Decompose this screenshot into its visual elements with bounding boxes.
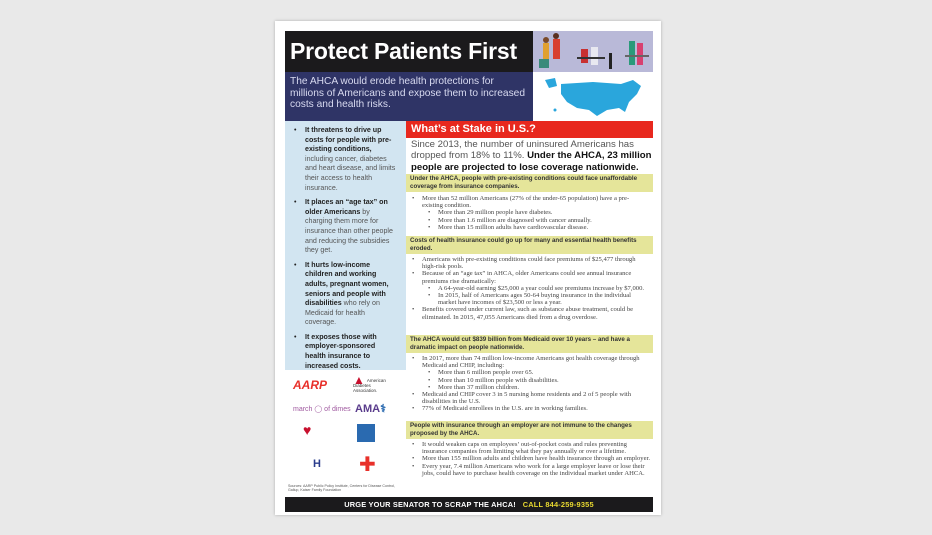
section 2 list: Because of an “age tax” in AHCA, older Americans could see annual insurance premiums rise dramatically: <box>422 270 631 285</box>
section 1 list <box>412 195 629 231</box>
logo: AHA: H <box>313 458 321 470</box>
subtitle band: millions of Americans and expose them to increased <box>290 88 525 98</box>
footer call to action: URGE YOUR SENATOR TO SCRAP THE AHCA! CALL 844-259-9355 <box>344 500 594 509</box>
section 2 list <box>412 256 644 321</box>
subtitle band: costs and health risks. <box>290 99 391 110</box>
section 1 list: More than 52 million Americans (27% of the under-65 population) have a pre-existing condition. <box>422 195 629 209</box>
logo: hospital building <box>357 424 375 442</box>
section 4 list: It would weaken caps on employees’ out-of-pocket costs and rules preventing insurance companies from limiting what they pay annually or over a lifetime. <box>422 441 627 455</box>
section 1 list: More than 15 million adults have cardiovascular disease. <box>438 224 588 231</box>
logo: ADA: American <box>367 378 386 383</box>
left column: key points: It exposes those with employer-sponsored health insurance to increased costs. <box>305 333 377 370</box>
section 2 list: Benefits covered under current law, such as substance abuse treatment, could be eliminated. In 2015, 47,055 Americans died from a drug overdose. <box>422 306 633 321</box>
left column: key points <box>285 121 406 370</box>
section 3 header: The AHCA would cut $839 billion from Medicaid over 10 years – and have a dramatic impact on people nationwide. <box>410 336 630 351</box>
section 1 list: More than 1.6 million are diagnosed with cancer annually. <box>438 217 592 224</box>
title banner <box>285 31 533 72</box>
left column: key points: It places an “age tax” on older Americans by charging them more for insurance than other people and reducing the subsidies they get. <box>305 198 393 254</box>
logo: ADA: Association. <box>353 388 377 393</box>
section 2 list: A 64-year-old earning $25,000 a year could see premiums increase by $7,000. <box>438 285 644 292</box>
section 1 header: Under the AHCA, people with pre-existing conditions could face unaffordable coverage from insurance companies. <box>410 175 637 190</box>
section 2 list: Americans with pre-existing conditions could face premiums of $25,477 through high-risk pools. <box>422 256 636 270</box>
subtitle band: The AHCA would erode health protections for <box>290 76 494 87</box>
logo: ADA: ▲ <box>353 373 365 387</box>
section 3 list: 77% of Medicaid enrollees in the U.S. are in working families. <box>422 405 588 412</box>
map of USA <box>533 72 653 121</box>
section 4 list: More than 155 million adults and children have health insurance through an employer. <box>422 455 650 462</box>
section 4 header: People with insurance through an employer are not immune to the changes proposed by the AHCA. <box>410 422 632 437</box>
logo: AARP: AARP <box>293 378 327 392</box>
section 1 list: More than 29 million people have diabetes. <box>438 209 552 216</box>
section 3 list: In 2017, more than 74 million low-income Americans got health coverage through Medicaid and CHIP, including: <box>422 355 640 369</box>
left column: key points: It hurts low-income children and working adults, pregnant women, seniors and people with disabilities who rely on Medicaid for health coverage. <box>305 261 389 326</box>
section 3 list: More than 6 million people over 65. <box>438 369 533 376</box>
red heading <box>406 121 653 138</box>
logo: heart association: ♥ <box>303 422 311 438</box>
section 3 list: More than 37 million children. <box>438 384 519 391</box>
logo: march of dimes: march ◯ of dimes <box>293 406 351 413</box>
section 3 list <box>412 355 640 412</box>
logo: ADA <box>353 373 386 393</box>
section 2 list: In 2015, half of Americans ages 50-64 buying insurance in the individual market have incomes of $23,500 or less a year. <box>438 292 631 306</box>
logo: ADA: Diabetes <box>353 383 371 388</box>
logos <box>292 373 386 476</box>
section 2 header: Costs of health insurance could go up for many and essential health benefits eroded. <box>410 237 637 252</box>
section 4 list <box>412 441 650 477</box>
section 3 list: More than 10 million people with disabilities. <box>438 377 559 384</box>
title banner: Protect Patients First <box>290 38 517 64</box>
illustration: people <box>533 31 653 72</box>
sources: Sources: AARP Public Policy Institute, Centers for Disease Control, Gallup, Kaiser Family Foundation <box>288 484 395 492</box>
intro text: Since 2013, the number of uninsured Americans has dropped from 18% to 11%. Under the AHCA, 23 million people are projected to lose coverage nationwide. <box>411 139 651 173</box>
paper sheet <box>275 21 661 515</box>
subtitle band <box>285 72 533 121</box>
section 3 list: Medicaid and CHIP cover 3 in 5 nursing home residents and 2 of 5 people with disabilities in the U.S. <box>422 391 631 405</box>
red heading: What’s at Stake in U.S.? <box>411 123 536 135</box>
footer call to action <box>285 497 653 512</box>
left column: key points: It threatens to drive up costs for people with pre-existing conditions, including cancer, diabetes and heart disease, and limits their access to health insurance. <box>305 126 395 192</box>
logo: cross: ✚ <box>359 454 376 476</box>
logo: AMA: AMA⚕ <box>355 403 386 415</box>
section 4 list: Every year, 7.4 million Americans who work for a large employer leave or lose their jobs, could have to purchase health coverage on the individual market under AHCA. <box>422 463 645 477</box>
